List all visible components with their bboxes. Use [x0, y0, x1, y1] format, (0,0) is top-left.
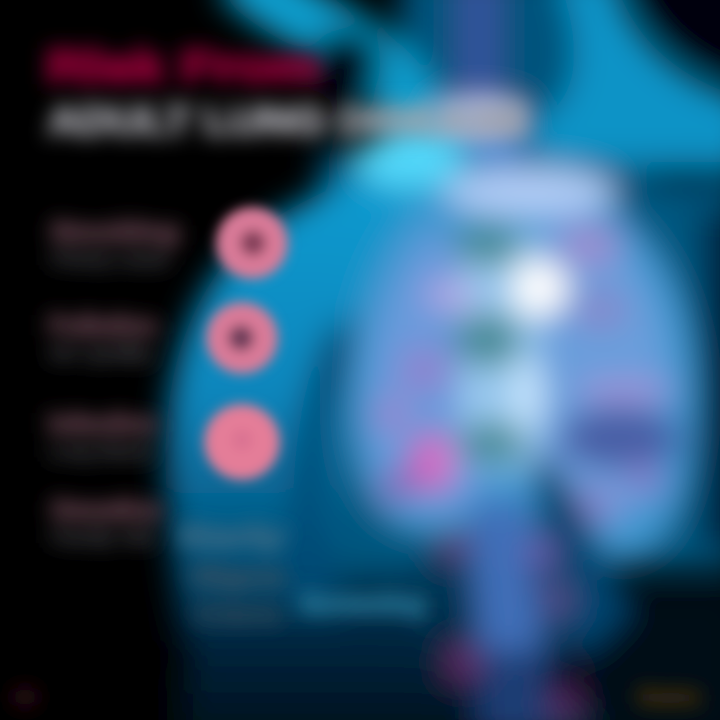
- central bronchus: [460, 230, 540, 470]
- icon: risk circle 3: [204, 404, 280, 480]
- teal caption text: Early: [180, 521, 286, 551]
- icon: risk circle 2: [206, 302, 278, 374]
- item 3 text: Infection: [48, 408, 158, 438]
- upper light band: [445, 168, 615, 216]
- dark shape beside title: [309, 29, 381, 101]
- teal caption text: Screening: [300, 588, 425, 618]
- bottom fade: [170, 590, 480, 720]
- left lung: [370, 235, 490, 512]
- item 3 text: Lung tissue: [48, 441, 153, 463]
- dark channel inside arc: [307, 330, 345, 600]
- footer mark: left: [11, 687, 39, 707]
- bright cyan junction: [355, 132, 465, 188]
- item 1 text: Primary cause: [50, 249, 170, 271]
- bronchus nodes: [454, 223, 526, 465]
- teal caption text: [180, 521, 425, 628]
- item 2 text: Pollution: [48, 310, 158, 340]
- spine pink dots: [439, 529, 578, 720]
- item 3 text: [48, 408, 158, 463]
- footer mark: orange label: Source: [638, 684, 700, 709]
- spine: [472, 500, 546, 720]
- title line 1: Risk From: [46, 40, 321, 92]
- item 4 text: [50, 494, 162, 549]
- item 4 text: Family risk: [50, 527, 156, 549]
- title: [46, 40, 528, 143]
- icon: risk circle 1: [216, 207, 288, 279]
- black upper right corner: [620, 0, 720, 85]
- trachea: [458, 0, 500, 110]
- chest field under arc: [165, 150, 470, 640]
- white glow: [512, 260, 568, 316]
- teal caption text: Signs: [190, 561, 285, 591]
- dark lobe notch: [535, 450, 630, 670]
- dark channel by spine: [412, 550, 468, 660]
- right lung: [535, 215, 668, 525]
- outer lung rim: [350, 169, 695, 555]
- illustration: lungs and airways: [165, 0, 720, 720]
- teal caption text: Care: [195, 601, 280, 628]
- lower dark notch: [544, 644, 596, 716]
- spine lower shade: [465, 650, 550, 720]
- item 2 text: Air quality: [48, 343, 153, 365]
- title line 2: ADULT LUNG DISEASE: [48, 99, 528, 143]
- risk factor list: [48, 216, 180, 549]
- right diagonal and horizontal band: [525, 0, 720, 162]
- item 1 text: Smoking: [50, 216, 180, 246]
- bronchus highlight: [510, 359, 546, 431]
- item 1 text: [50, 216, 180, 271]
- upper airway bands: [240, 0, 445, 155]
- central lavender spot: [438, 100, 522, 132]
- item 2 text: [48, 310, 158, 365]
- lung texture: [376, 223, 680, 523]
- dark bar right of chest: [640, 167, 720, 189]
- item 4 text: Genetics: [50, 494, 162, 524]
- deep blue base: [190, 0, 720, 720]
- light blue under junction: [461, 134, 529, 166]
- infected pink spot: [413, 434, 453, 490]
